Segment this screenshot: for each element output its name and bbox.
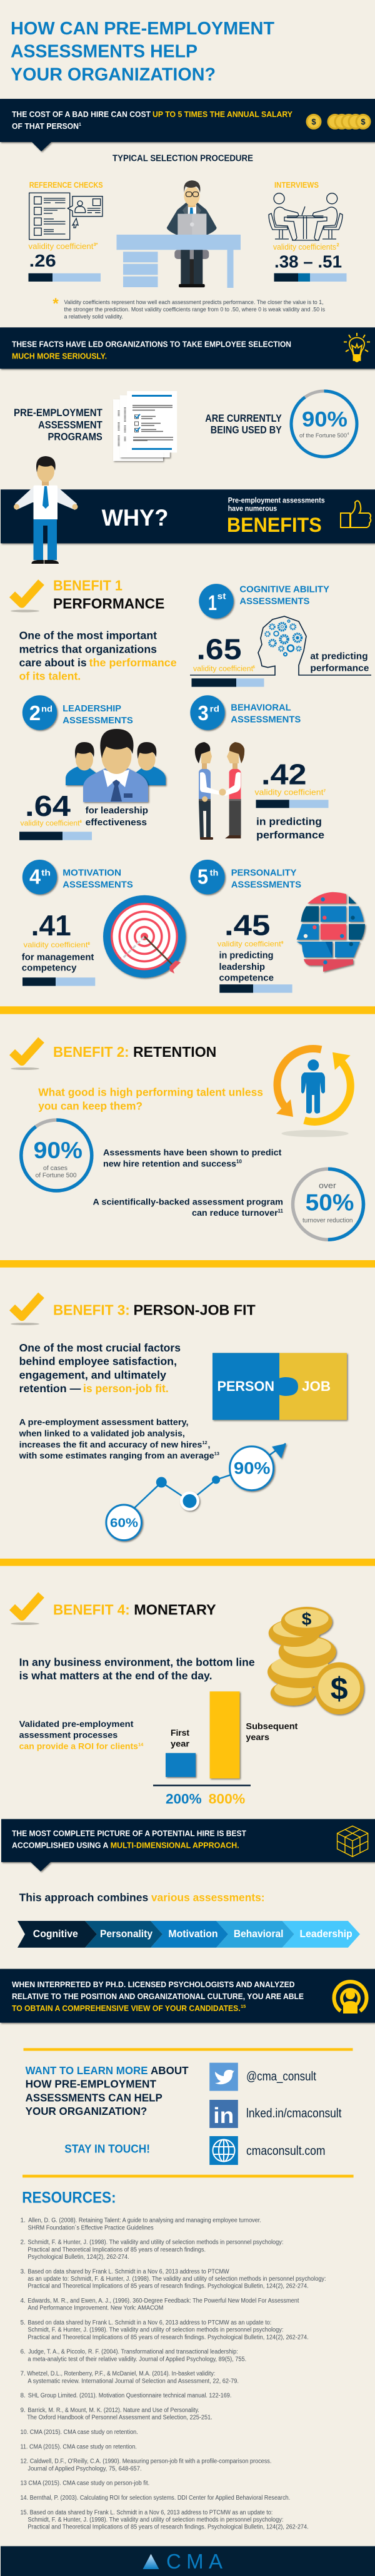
section: benefit 1: PERFORMANCE: [53, 596, 164, 612]
list: references: as an update to: Schmidt, F. & Hunter, J. (1998). The validity and utility of selection methods in personnel psychology:: [28, 2276, 326, 2283]
banner: why: [1, 489, 375, 543]
panel: leadership assessments: LEADERSHIP: [62, 703, 121, 714]
icon: coins: [306, 114, 371, 130]
panel: motivation assessments: validity coefficient: [24, 940, 88, 949]
footer: CMA logo: CMA: [166, 2550, 222, 2573]
icon: check mark: [11, 1595, 41, 1625]
badge: 4th: 4: [29, 865, 41, 888]
text: pre-employment assessment programs: PRE-EMPLOYMENT: [14, 407, 102, 419]
panel: behavioral assessments: BEHAVIORAL: [231, 703, 291, 713]
panel: cognitive ability assessments: [190, 584, 371, 687]
list: references: 7.: [20, 2371, 26, 2378]
section: benefit 2 retention: BENEFIT 2:: [53, 1044, 129, 1060]
banner: interpreted by psychologists: [0, 1969, 375, 2023]
text: assessment battery: increases the fit and accuracy of new hires: [19, 1439, 202, 1449]
panel: personality assessments: leadership: [219, 962, 265, 972]
badge: 2nd: nd: [41, 703, 52, 713]
panel: behavioral assessments: in predicting: [256, 815, 322, 827]
banner: multi-dimensional approach: ACCOMPLISHED USING A: [12, 1841, 109, 1850]
section: benefit 4 monetary: In any business environment, the bottom line: [19, 1656, 255, 1668]
list: references: [20, 2217, 326, 2531]
section: benefit 2 retention: A scientifically-backed assessment program: [92, 1196, 283, 1206]
panel: personality assessments: validity coefficient: [218, 940, 282, 949]
contact: linkedin: in: [213, 2104, 234, 2128]
list: references: 3.: [20, 2268, 26, 2275]
list: references: 13 CMA (2015). CMA case study on person-job fit.: [20, 2480, 149, 2487]
panel: cognitive ability assessments: at predicting: [310, 651, 368, 661]
icon: coins: $: [311, 117, 316, 126]
list: references: 5.: [20, 2319, 26, 2326]
banner: these facts: MUCH MORE SERIOUSLY.: [12, 351, 107, 360]
badge: 3rd: [190, 695, 225, 730]
banner: multi-dimensional approach: MULTI-DIMENSIONAL APPROACH.: [111, 1841, 239, 1850]
list: references: 2.: [20, 2239, 26, 2246]
chevron process: assessments: Personality: [100, 1928, 152, 1940]
badge: 5th: 5: [198, 865, 208, 888]
icon: globe: [212, 2140, 235, 2161]
bar: .42: [256, 800, 329, 808]
list: references: a meta-analytic test of their relative validity. Journal of Applied Psychology, 89(5), 755.: [28, 2356, 246, 2363]
panel: motivation assessments: ASSESSMENTS: [62, 879, 133, 890]
chevron process: assessments: Leadership: [300, 1928, 352, 1940]
list: references: 9.: [20, 2407, 26, 2414]
list: references: Practical and Theoretical Implications of 85 years of research findings.: [28, 2246, 206, 2253]
text: person-job fit intro: retention —: [19, 1382, 81, 1395]
icon: person job puzzle: [212, 1353, 347, 1420]
title: YOUR ORGANIZATION?: [11, 65, 216, 85]
banner: cost of a bad hire: UP TO 5 TIMES THE ANNUAL SALARY: [152, 109, 292, 119]
panel: behavioral assessments: .42: [261, 758, 307, 790]
badge: 1st: [199, 584, 234, 618]
text: assessment battery: 13: [214, 1450, 219, 1457]
panel: cognitive ability assessments: performance: [310, 663, 369, 673]
section: benefit 1: [11, 577, 177, 683]
text: ROI claim: [19, 1719, 144, 1751]
panel: leadership assessments: [19, 695, 166, 840]
list: references: Barrick, M. R., & Mount, M. K. (2012). Nature and Use of Personality.: [28, 2407, 199, 2414]
section: benefit 2 retention: you can keep them?: [38, 1099, 142, 1112]
list: references: And Performance Improvement. New York: AMACOM: [28, 2305, 163, 2312]
panel: reference checks: 3*: [94, 242, 98, 247]
chart: ROI bars: 200%: [166, 1791, 202, 1807]
panel: interviews: 2: [336, 242, 339, 248]
panel: personality assessments: in predicting: [219, 950, 274, 961]
panel: cognitive ability assessments: 5: [252, 666, 255, 669]
panel: personality assessments: 9: [281, 941, 284, 945]
section: benefit 3 person-job fit: PERSON-JOB FIT: [134, 1302, 256, 1318]
badge: 5th: th: [210, 867, 218, 877]
banner: these facts: [0, 327, 375, 369]
panel: personality assessments: competence: [219, 973, 274, 984]
text: benefit 1 intro: One of the most important: [19, 629, 157, 642]
chart: 60% to 90% line: 90%: [234, 1459, 270, 1478]
panel: motivation assessments: 8: [88, 942, 90, 946]
badge: 2nd: 2: [29, 701, 41, 725]
text: approach combines: [19, 1891, 265, 1903]
panel: cognitive ability assessments: ASSESSMENTS: [239, 596, 309, 607]
contact: website: [209, 2136, 325, 2165]
text: person-job fit intro: [19, 1341, 181, 1395]
call to action: STAY IN TOUCH!: [64, 2143, 150, 2156]
icon: stack of coins: $: [331, 1671, 348, 1706]
banner: cost of a bad hire: OF THAT PERSON: [12, 121, 79, 131]
list: references: A systematic review. International Journal of Selection and Assessment, 22, 62-79.: [28, 2378, 239, 2385]
section: benefit 4 monetary: MONETARY: [134, 1602, 216, 1618]
badge: 4th: [22, 860, 57, 894]
note: validity coefficient explanation: Validity coefficients represent how well each assessment predicts performance. The closer the value is to 1,: [64, 299, 324, 306]
panel: motivation assessments: for management: [22, 952, 94, 962]
icon: twitter bird: [215, 2070, 234, 2084]
chart: 90% of cases ring: of Fortune 500: [36, 1173, 77, 1179]
icon: assessment documents: [113, 391, 177, 461]
text: person-job fit intro: is person-job fit.: [83, 1382, 169, 1395]
panel: reference checks: REFERENCE CHECKS: [29, 180, 103, 190]
icon: stack of coins: [268, 1607, 364, 1714]
heading: resources: RESOURCES:: [22, 2189, 116, 2207]
section: benefit 2 retention: RETENTION: [133, 1044, 216, 1060]
panel: behavioral assessments: [190, 695, 329, 841]
note: validity coefficient explanation: the stronger the prediction. Most validity coefficients range from 0 to .50, where 0 is weak validity and .50 is: [64, 306, 325, 313]
panel: leadership assessments: validity coefficient: [20, 820, 80, 827]
panel: interviews: INTERVIEWS: [274, 180, 319, 190]
icon: cube: [338, 1826, 368, 1856]
chart: ROI bars: year: [171, 1739, 190, 1749]
banner: interpreted by psychologists: RELATIVE TO THE POSITION AND ORGANIZATIONAL CULTURE, YOU ARE ABLE: [12, 1992, 304, 2001]
panel: motivation assessments: competency: [22, 963, 77, 974]
list: references: The Oxford Handbook of Personnel Assessment and Selection, 225-251.: [27, 2415, 212, 2421]
text: benefit 1 intro: metrics that organizations: [19, 643, 157, 655]
text: benefit 1 intro: [19, 629, 177, 683]
list: references: Schmidt, F. & Hunter, J. (1998). The validity and utility of selection methods in personnel psychology:: [28, 2517, 283, 2523]
panel: personality assessments: .45: [224, 909, 270, 941]
bar: .64: [19, 832, 92, 840]
text: are currently being used by: BEING USED BY: [211, 425, 282, 436]
banner: why: WHY?: [102, 505, 168, 531]
contact: linkedin: [209, 2100, 342, 2128]
chart: over 50% turnover reduction ring: over: [319, 1181, 336, 1190]
list: references: 6.: [20, 2349, 26, 2356]
list: references: Based on data shared by Frank L. Schmidt in a Nov 6, 2013 address to PTCMW as an update to:: [28, 2319, 271, 2326]
list: references: Schmidt, F. & Hunter, J. (1998). The validity and utility of selection methods in personnel psychology:: [28, 2327, 283, 2334]
icon: logo triangle: [142, 2554, 159, 2569]
badge: 5th: [190, 860, 225, 894]
text: pre-employment assessment programs: PROGRAMS: [48, 431, 102, 442]
chart: ROI bars: 800%: [209, 1791, 245, 1807]
icon: light bulb: [344, 333, 370, 362]
section: benefit 1: BENEFIT 1: [53, 577, 122, 593]
panel: leadership assessments: 6: [80, 820, 82, 824]
section: benefit 3 person-job fit: BENEFIT 3:: [53, 1302, 130, 1318]
contact: linkedin: lnked.in/cmaconsult: [246, 2107, 342, 2120]
text: assessment battery: A pre-employment assessment battery,: [19, 1417, 189, 1427]
icon: person job puzzle: PERSON: [218, 1378, 274, 1394]
list: references: SHRM Foundation´s Effective Practice Guidelines: [28, 2224, 154, 2231]
badge: 4th: th: [41, 867, 51, 877]
icon: interview table: [269, 193, 342, 240]
heading: typical selection procedure: TYPICAL SELECTION PROCEDURE: [112, 154, 253, 164]
banner: cost of a bad hire: THE COST OF A BAD HIRE CAN COST: [12, 109, 151, 119]
icon: head with gears: [190, 616, 371, 675]
panel: cognitive ability assessments: validity coefficient: [193, 665, 254, 673]
list: references: Journal of Applied Psychology, 75, 648-657.: [28, 2465, 142, 2472]
banner: cost of a bad hire: 1: [79, 123, 81, 127]
icon: coins: $: [361, 117, 366, 126]
section: benefit 3 person-job fit: [11, 1295, 347, 1540]
call to action: [26, 2064, 189, 2156]
chart: 60% to 90% line: [106, 1443, 286, 1540]
icon: target with arrow: [103, 895, 186, 978]
panel: motivation assessments: .41: [31, 909, 71, 942]
panel: cognitive ability assessments: COGNITIVE ABILITY: [239, 584, 329, 595]
text: retention claim: new hire retention and success: [103, 1158, 236, 1168]
badge: 1st: st: [218, 591, 226, 601]
text: benefit 1 intro: of its talent.: [19, 670, 81, 683]
text: assessment battery: 12: [202, 1440, 208, 1445]
panel: reference checks: [29, 180, 103, 282]
illustration: handshake: [195, 742, 244, 840]
list: references: Allen, D. G. (2008). Retaining Talent: A guide to analysing and managing employee turnover.: [28, 2217, 261, 2224]
text: turnover claim: 11: [278, 1208, 284, 1214]
panel: behavioral assessments: ASSESSMENTS: [231, 714, 301, 725]
panel: personality assessments: [190, 860, 365, 993]
banner: these facts: THESE FACTS HAVE LED ORGANIZATIONS TO TAKE EMPLOYEE SELECTION: [12, 339, 291, 349]
panel: reference checks: validity coefficient: [29, 242, 94, 251]
list: references: Judge, T. A., & Piccolo, R. F. (2004). Transformational and transactional leadership:: [28, 2349, 238, 2356]
title: ASSESSMENTS HELP: [11, 42, 198, 62]
text: pre-employment assessment programs: ASSESSMENT: [38, 419, 102, 430]
chart: 90% of the Fortune 500 ring: 4: [348, 432, 349, 436]
text: retention claim: 10: [236, 1159, 242, 1164]
panel: interviews: [269, 180, 346, 282]
chart: over 50% turnover reduction ring: turnover reduction: [302, 1216, 353, 1224]
text: assessment battery: [19, 1417, 219, 1460]
icon: check mark: [11, 1040, 41, 1070]
note: validity coefficient explanation: *: [52, 295, 59, 312]
list: references: Practical and Theoretical Implications of 85 years of research findings. Psychological Bulletin, 124(2), 262-274.: [28, 2334, 309, 2341]
icon: check mark: [11, 582, 41, 612]
section: benefit 4 monetary: BENEFIT 4:: [53, 1602, 130, 1618]
text: assessment battery: with some estimates ranging from an average: [19, 1450, 214, 1460]
text: ROI claim: 14: [138, 1742, 144, 1747]
icon: check mark: [11, 1295, 41, 1325]
title: HOW CAN PRE-EMPLOYMENT: [11, 19, 274, 39]
badge: 2nd: [22, 695, 57, 730]
banner: interpreted by psychologists: WHEN INTERPRETED BY PH.D. LICENSED PSYCHOLOGISTS AND ANALYZED: [12, 1980, 295, 1989]
illustration: man at desk: [116, 180, 241, 288]
chart: 90% of cases ring: 90%: [34, 1138, 82, 1163]
text: are currently being used by: [205, 413, 282, 436]
illustration: standing man: [14, 456, 78, 564]
list: references: Based on data shared by Frank L. Schmidt in a Nov 6, 2013 address to PTCMW: [28, 2268, 229, 2275]
chevron process: assessments: Motivation: [168, 1928, 218, 1940]
badge: 1st: 1: [208, 591, 217, 615]
banner: why: Pre-employment assessments: [228, 496, 325, 504]
icon: person in rings: [334, 1982, 366, 2013]
chart: 90% of cases ring: of cases: [43, 1165, 68, 1172]
list: references: Practical and Theoretical Implications of 85 years of research findings. Psychological Bulletin, 124(2), 262-274.: [28, 2524, 309, 2531]
title: [11, 19, 274, 85]
list: references: Edwards, M. R., and Ewen, A. J., (1996). 360-Degree Feedback: The Powerful New Model For Assessment: [28, 2298, 299, 2304]
list: references: 4.: [20, 2298, 26, 2304]
note: validity coefficient explanation: [52, 295, 325, 320]
section: benefit 2 retention: [11, 1040, 364, 1240]
contact: twitter: @cma_consult: [246, 2070, 316, 2084]
text: turnover claim: can reduce turnover: [192, 1208, 278, 1218]
call to action: YOUR ORGANIZATION?: [26, 2105, 147, 2117]
chevron process: assessments: Cognitive: [33, 1928, 78, 1940]
bar: .45: [219, 984, 292, 993]
text: approach combines: various assessments:: [151, 1891, 265, 1903]
list: references: Psychological Bulletin, 124(2), 262-274.: [28, 2254, 129, 2261]
text: ROI claim: assessment processes: [19, 1730, 118, 1740]
icon: leadership team: [66, 729, 166, 802]
section: benefit 2 retention: What good is high performing talent unless: [38, 1086, 263, 1099]
list: references: 10. CMA (2015). CMA case study on retention.: [20, 2429, 138, 2436]
text: benefit 1 intro: the performance: [89, 656, 177, 669]
text: approach combines: This approach combines: [19, 1891, 149, 1903]
call to action: WANT TO LEARN MORE: [26, 2064, 148, 2077]
list: references: Practical and Theoretical Implications of 85 years of research findings. Psychological Bulletin, 124(2), 262-274.: [28, 2283, 309, 2290]
chart: ROI bars: Subsequent: [246, 1721, 298, 1731]
text: person-job fit intro: behind employee satisfaction,: [19, 1355, 177, 1368]
list: references: 11. CMA (2015). CMA case study on retention.: [20, 2443, 137, 2450]
icon: retention cycle: [276, 1049, 351, 1137]
panel: interviews: .38 – .51: [274, 252, 342, 272]
chart: 90% of the Fortune 500 ring: of the Fortune 500: [299, 432, 347, 439]
icon: puzzle head: [297, 892, 365, 972]
section: benefit 4 monetary: is what matters at the end of the day.: [19, 1669, 212, 1682]
panel: motivation assessments: MOTIVATION: [62, 867, 121, 878]
list: references: 8.: [20, 2393, 26, 2400]
list: references: 1.: [20, 2217, 26, 2224]
chart: 60% to 90% line: 60%: [110, 1517, 138, 1530]
chevron process: assessments: Behavioral: [234, 1928, 284, 1940]
footer: CMA logo: [1, 2546, 375, 2576]
banner: interpreted by psychologists: TO OBTAIN A COMPREHENSIVE VIEW OF YOUR CANDIDATES.: [12, 2003, 241, 2013]
section: benefit 2 retention: Assessments have been shown to predict: [103, 1148, 282, 1158]
note: validity coefficient explanation: a relatively solid validity.: [64, 313, 123, 320]
panel: leadership assessments: .64: [25, 790, 71, 822]
chart: over 50% turnover reduction ring: 50%: [306, 1189, 354, 1215]
text: are currently being used by: ARE CURRENTLY: [205, 413, 282, 424]
contact: twitter: [209, 2063, 316, 2091]
banner: why: have numerous: [228, 504, 277, 513]
list: references: 15. Based on data shared by Frank L. Schmidt in a Nov 6, 2013 address to PTCMW as an update to:: [20, 2509, 272, 2516]
section: benefit 4 monetary: [11, 1595, 364, 1807]
banner: interpreted by psychologists: 15: [241, 2003, 246, 2009]
list: references: Whetzel, D.L., Rotenberry, P.F., & McDaniel, M.A. (2014). In-basket validity:: [27, 2371, 215, 2378]
text: benefit 1 intro: care about is: [19, 656, 87, 669]
bar: .38 to .51: [274, 273, 346, 282]
chart: 90% of the Fortune 500 ring: [291, 391, 357, 457]
text: pre-employment assessment programs: [14, 407, 102, 442]
chevron process: assessments: [18, 1921, 360, 1948]
panel: behavioral assessments: performance: [256, 829, 324, 841]
icon: reference document: [29, 193, 102, 240]
list: references: SHL Group Limited. (2011). Motivation Questionnaire technical manual. 122-169.: [28, 2393, 231, 2400]
panel: cognitive ability assessments: .65: [196, 633, 241, 665]
bar: .65: [191, 678, 264, 687]
call to action: HOW PRE-EMPLOYMENT: [26, 2078, 156, 2090]
panel: leadership assessments: effectiveness: [86, 817, 147, 828]
badge: 3rd: 3: [198, 701, 209, 725]
chart: over 50% turnover reduction ring: [292, 1169, 364, 1240]
list: references: 12. Caldwell, D.F., O'Reilly, C.A. (1990). Measuring person-job fit with a profile-comparison process.: [20, 2458, 271, 2465]
icon: thumbs up: [341, 501, 371, 527]
panel: behavioral assessments: 7: [324, 789, 326, 793]
panel: leadership assessments: ASSESSMENTS: [62, 715, 133, 726]
chart: ROI bars: [153, 1691, 298, 1807]
call to action: ASSESSMENTS CAN HELP: [26, 2091, 162, 2104]
banner: cost of a bad hire: [0, 99, 375, 151]
bar: .26: [29, 273, 101, 282]
icon: person job puzzle: JOB: [302, 1378, 331, 1394]
panel: personality assessments: ASSESSMENTS: [231, 879, 301, 890]
text: assessment battery: when linked to a validated job analysis,: [19, 1428, 185, 1438]
chart: 90% of cases ring: [21, 1120, 92, 1191]
chart: ROI bars: First: [171, 1728, 189, 1738]
banner: multi-dimensional approach: THE MOST COMPLETE PICTURE OF A POTENTIAL HIRE IS BEST: [12, 1829, 246, 1838]
panel: behavioral assessments: validity coefficient: [255, 788, 324, 797]
banner: why: BENEFITS: [227, 514, 322, 536]
contact: website: cmaconsult.com: [246, 2144, 325, 2158]
panel: personality assessments: PERSONALITY: [231, 867, 296, 878]
text: assessment battery: ,: [208, 1439, 210, 1449]
panel: reference checks: .26: [29, 251, 56, 270]
list: references: 14. Bernthal, P. (2003). Calculating ROI for selection systems. DDI Center for Applied Behavioral Research.: [20, 2495, 290, 2502]
call to action: ABOUT: [151, 2064, 189, 2077]
chart: 90% of the Fortune 500 ring: 90%: [302, 408, 348, 432]
panel: leadership assessments: for leadership: [86, 805, 148, 816]
banner: multi-dimensional approach: [1, 1819, 375, 1871]
panel: motivation assessments: [22, 860, 186, 986]
panel: interviews: validity coefficients: [273, 242, 336, 252]
list: references: Schmidt, F. & Hunter, J. (1998). The validity and utility of selection methods in personnel psychology:: [28, 2239, 283, 2246]
chart: ROI bars: years: [246, 1732, 269, 1742]
text: ROI claim: can provide a ROI for clients: [19, 1741, 138, 1751]
text: ROI claim: Validated pre-employment: [19, 1719, 134, 1729]
text: person-job fit intro: One of the most crucial factors: [19, 1341, 181, 1354]
bar: .41: [22, 977, 95, 986]
text: person-job fit intro: engagement, and ultimately: [19, 1369, 166, 1382]
badge: 3rd: rd: [210, 703, 219, 713]
icon: stack of coins: $: [302, 1609, 312, 1629]
